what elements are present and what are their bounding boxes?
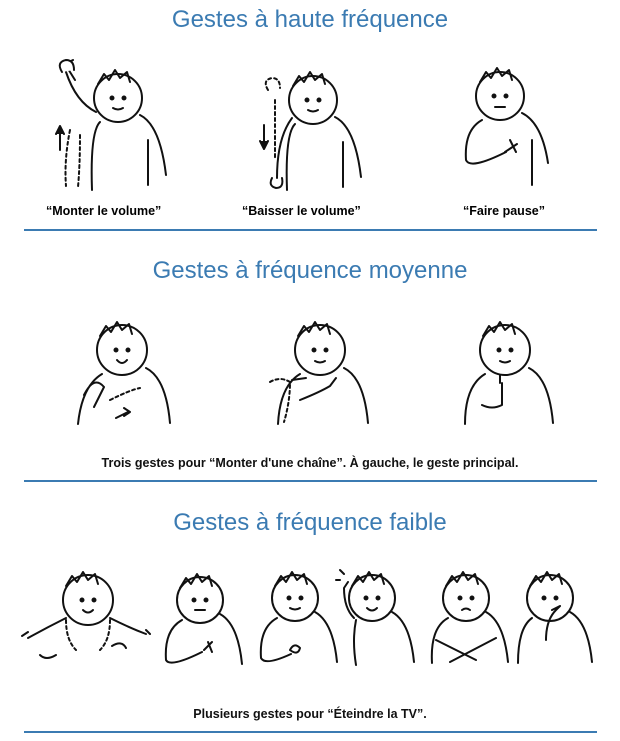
caption: row 2: Trois gestes pour “Monter d'une chaîne”. À gauche, le geste principal. [102, 456, 518, 470]
caption: row 1 [46, 204, 545, 218]
figure: monter le volume [56, 60, 166, 190]
figure: baisser le volume [260, 72, 361, 190]
figure: faire pause [466, 68, 548, 185]
caption: row 1: “Baisser le volume” [242, 204, 361, 218]
title: haute fréquence: Gestes à haute fréquence [172, 6, 448, 33]
caption: row 1: “Faire pause” [463, 204, 545, 218]
title: fréquence moyenne: Gestes à fréquence moyenne [153, 257, 467, 284]
caption: row 3: Plusieurs gestes pour “Éteindre la TV”. [193, 707, 427, 721]
title: fréquence faible: Gestes à fréquence faible [173, 509, 447, 536]
figures row 2 [78, 322, 170, 424]
figures row 3 [22, 572, 150, 658]
caption: row 1: “Monter le volume” [46, 204, 161, 218]
